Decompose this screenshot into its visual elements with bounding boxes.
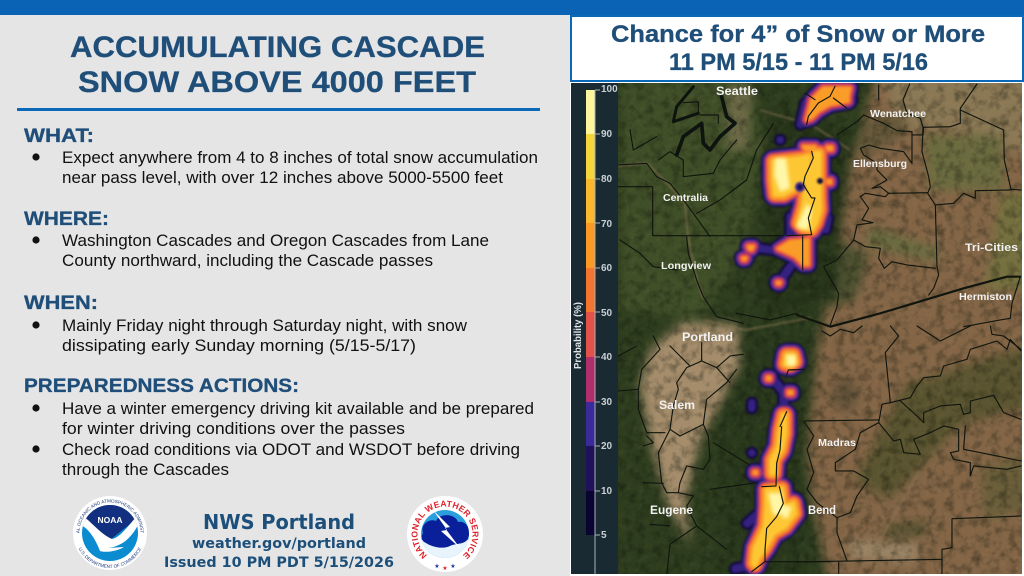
legend tick labels: 50 [601,308,613,319]
county boundaries [618,83,1022,574]
section: preparedness actions [24,376,534,479]
icon: NOAA logo [73,496,147,570]
right heading box [571,16,1023,81]
section: preparedness actions: PREPAREDNESS ACTIONS: [24,376,299,397]
right heading box: Chance for 4” of Snow or More [611,21,985,48]
legend tick labels: 30 [601,397,613,408]
icon: NOAA logo: NATIONAL OCEANIC AND ATMOSPHERIC ADMINISTRATION [76,499,144,534]
city labels: Bend [808,505,836,517]
section: preparedness actions: through the Cascades [62,460,229,479]
title rule [17,108,540,111]
section: what: near pass level, with over 12 inches above 5000-5500 feet [62,168,503,187]
city labels: Madras [818,437,856,449]
legend tick labels: 5 [601,530,607,541]
city labels: Centralia [663,192,708,204]
left panel background [0,15,570,576]
icon: NOAA logo: U.S. DEPARTMENT OF COMMERCE [79,547,142,568]
legend colour bar [586,90,595,535]
terrain texture [618,83,1022,574]
section: preparedness actions: Have a winter emergency driving kit available and be prepared [62,399,534,418]
holes in the field [795,182,805,192]
city labels: Seattle [716,86,758,98]
icon: NOAA logo: NOAA [98,515,122,525]
section: when: Mainly Friday night through Saturday night, with snow [62,316,468,335]
legend tick labels: 60 [601,263,613,274]
snow probability blobs [735,86,853,569]
section: when [24,293,468,355]
boundaries over the snow field [752,86,847,572]
section: preparedness actions: for winter driving conditions over the passes [62,419,405,438]
city labels: Portland [682,330,733,344]
section: when: WHEN: [24,293,98,314]
city labels: Eugene [650,503,693,517]
legend tick labels: 20 [601,441,613,452]
legend tick labels: 80 [601,174,613,185]
legend tick labels: 70 [601,219,613,230]
title [70,31,485,99]
city labels: Hermiston [959,291,1012,303]
probability legend [571,83,618,574]
city labels [650,86,1018,517]
top blue bar [0,0,1024,15]
icon: National Weather Service logo: NATIONAL WEATHER SERVICE [412,500,478,560]
map: probability of 4 inches of snow [570,70,1024,576]
terrain base [600,70,1024,576]
pale highest probability core [768,158,812,518]
icon: National Weather Service logo: ★ [450,563,456,570]
icon: National Weather Service logo: ★ [442,565,448,572]
title: SNOW ABOVE 4000 FEET [78,66,476,99]
city labels: Salem [659,398,695,412]
section: where [24,209,489,270]
section: where: Washington Cascades and Oregon Cascades from Lane [62,231,489,250]
title: ACCUMULATING CASCADE [70,31,485,64]
section: what [24,126,538,187]
section: when: dissipating early Sunday morning (5/15-5/17) [62,336,416,355]
city labels: Ellensburg [853,158,907,170]
legend tick labels: 100 [601,84,618,95]
city labels: Tri-Cities [965,242,1018,254]
footer office text: NWS Portland [203,510,355,534]
legend axis title: Probability (%) [573,302,584,369]
legend tick labels: 10 [601,486,613,497]
legend tick labels: 90 [601,129,613,140]
section: where: WHERE: [24,209,109,230]
footer office text: weather.gov/portland [192,536,366,552]
city labels: Longview [661,260,712,272]
legend tick labels: 40 [601,352,613,363]
section: preparedness actions: Check road conditions via ODOT and WSDOT before driving [62,440,520,459]
section: what: Expect anywhere from 4 to 8 inches of total snow accumulation [62,148,538,167]
footer office text: Issued 10 PM PDT 5/15/2026 [164,555,394,571]
legend tick labels [601,84,618,541]
footer office text [164,510,394,571]
Puget Sound water [673,87,735,155]
section: what: WHAT: [24,126,94,147]
section: where: County northward, including the Cascade passes [62,251,433,270]
right heading box: 11 PM 5/15 - 11 PM 5/16 [669,49,928,76]
city labels: Wenatchee [870,108,926,120]
icon: National Weather Service logo: ★ [434,563,440,570]
legend axis and ticks [595,90,600,574]
